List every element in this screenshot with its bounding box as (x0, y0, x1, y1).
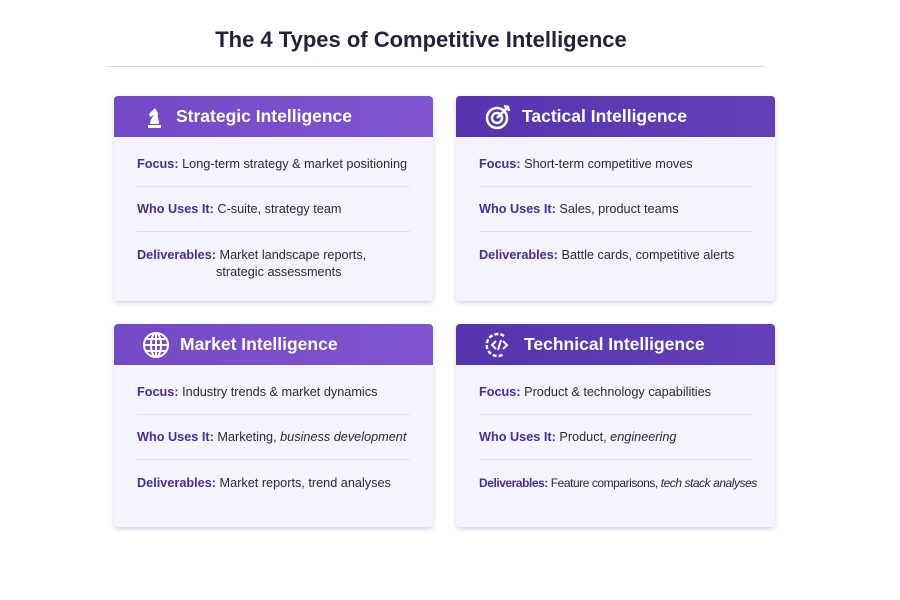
text: deliverables: Deliverables: Feature comparisons, tech stack analyses (479, 476, 757, 490)
text: deliverables: Deliverables: Battle cards, competitive alerts (479, 248, 734, 262)
text: who: Who Uses It: Product, engineering (479, 430, 676, 444)
text: who (137, 415, 410, 460)
text: who (479, 187, 752, 232)
text: focus (479, 365, 752, 415)
text: who: Who Uses It: Sales, product teams (479, 202, 679, 216)
text: deliverables: Deliverables: Market landscape reports, (137, 248, 366, 262)
text: who (479, 415, 752, 460)
text: deliverables (137, 248, 366, 279)
text: deliverables: strategic assessments (216, 265, 342, 279)
header: tactical: Tactical Intelligence (522, 106, 687, 126)
text: who: Who Uses It: Marketing, business development (137, 430, 406, 444)
header: strategic (114, 96, 433, 137)
panel: strategic (114, 96, 433, 301)
header: strategic: Strategic Intelligence (176, 106, 352, 126)
text: focus: Focus: Industry trends & market dynamics (137, 385, 377, 399)
text: focus: Focus: Short-term competitive moves (479, 157, 693, 171)
panel: technical (456, 324, 775, 527)
text: who (137, 187, 410, 232)
header: tactical (456, 96, 775, 137)
header: market (114, 324, 433, 365)
text: focus (137, 365, 410, 415)
panel: market (114, 324, 433, 527)
panel: tactical (456, 96, 775, 301)
title: The 4 Types of Competitive Intelligence (215, 27, 627, 52)
text: who: Who Uses It: C-suite, strategy team (137, 202, 341, 216)
text: focus (137, 137, 410, 187)
text: focus: Focus: Long-term strategy & market positioning (137, 157, 407, 171)
header: technical (456, 324, 775, 365)
header: market: Market Intelligence (180, 334, 338, 354)
text: deliverables: Deliverables: Market reports, trend analyses (137, 476, 391, 490)
header: technical: Technical Intelligence (524, 334, 705, 354)
text: focus (479, 137, 752, 187)
text: focus: Focus: Product & technology capabilities (479, 385, 711, 399)
